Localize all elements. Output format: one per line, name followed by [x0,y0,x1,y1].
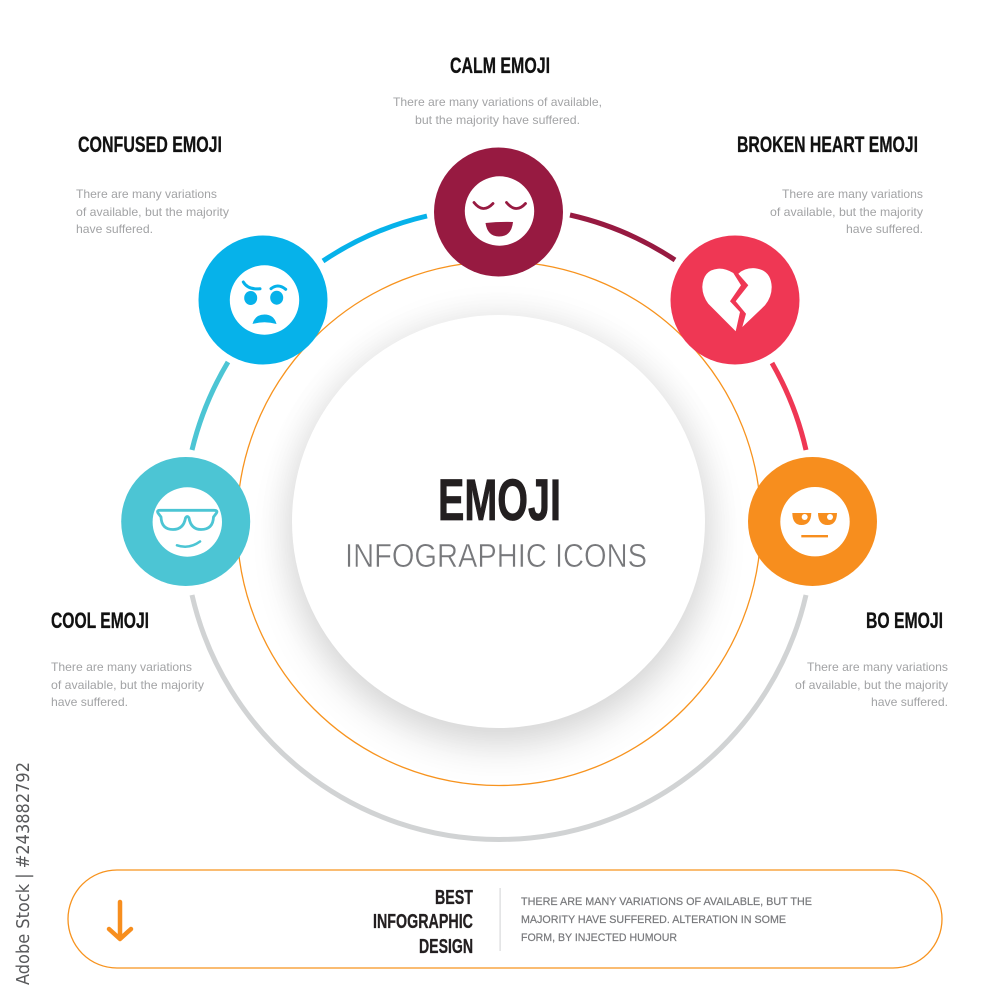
label: calm emoji: CALM EMOJI [450,53,550,78]
center shadow [285,308,713,748]
node: bored emoji [748,457,877,586]
label: calm emoji [393,53,602,127]
label: broken heart emoji: of available, but the majority [770,205,923,219]
arc: red [772,363,806,450]
label: bo emoji [795,608,948,709]
label: confused emoji [76,132,229,236]
label: confused emoji: CONFUSED EMOJI [78,132,222,157]
center title [345,468,647,574]
label: confused emoji: There are many variations [76,187,217,201]
node: calm emoji [434,148,563,276]
bottom banner [68,870,942,968]
label: calm emoji: There are many variations of available, [393,95,602,109]
label: cool emoji: There are many variations [51,660,192,674]
label: cool emoji: of available, but the majority [51,678,204,692]
label: bo emoji: There are many variations [807,660,948,674]
banner heading: BEST [435,887,473,909]
arc: maroon [570,215,675,260]
label: broken heart emoji [737,132,923,236]
orange ring [237,262,761,786]
banner paragraph: THERE ARE MANY VARIATIONS OF AVAILABLE, BUT THE [521,896,812,908]
node: broken heart emoji [670,236,800,364]
arc: teal [192,362,228,450]
label: bo emoji: have suffered. [871,695,948,709]
node: cool emoji [121,457,250,586]
label: bo emoji: BO EMOJI [866,608,943,633]
banner heading [373,887,473,958]
banner paragraph: FORM, BY INJECTED HUMOUR [521,932,677,944]
stock side label: Adobe Stock | #243882792 [13,762,34,985]
label: broken heart emoji: There are many variations [782,187,923,201]
label: broken heart emoji: BROKEN HEART EMOJI [737,132,918,157]
arc: blue [323,216,427,261]
center white disc [292,315,705,728]
outer arc: grey [192,595,806,839]
label: cool emoji: have suffered. [51,695,128,709]
label: cool emoji [51,608,204,709]
label: confused emoji: have suffered. [76,222,153,236]
center title: INFOGRAPHIC ICONS [345,537,647,574]
banner heading: DESIGN [419,936,473,958]
icon: down arrow [109,902,131,939]
label: bo emoji: of available, but the majority [795,678,948,692]
center title: EMOJI [438,468,561,533]
label: broken heart emoji: have suffered. [846,222,923,236]
node: confused emoji [198,236,328,364]
banner heading: INFOGRAPHIC [373,911,473,933]
banner paragraph: MAJORITY HAVE SUFFERED. ALTERATION IN SOME [521,914,786,926]
label: confused emoji: of available, but the majority [76,205,229,219]
label: calm emoji: but the majority have suffered. [415,113,580,127]
banner paragraph [521,896,812,944]
label: cool emoji: COOL EMOJI [51,608,149,633]
